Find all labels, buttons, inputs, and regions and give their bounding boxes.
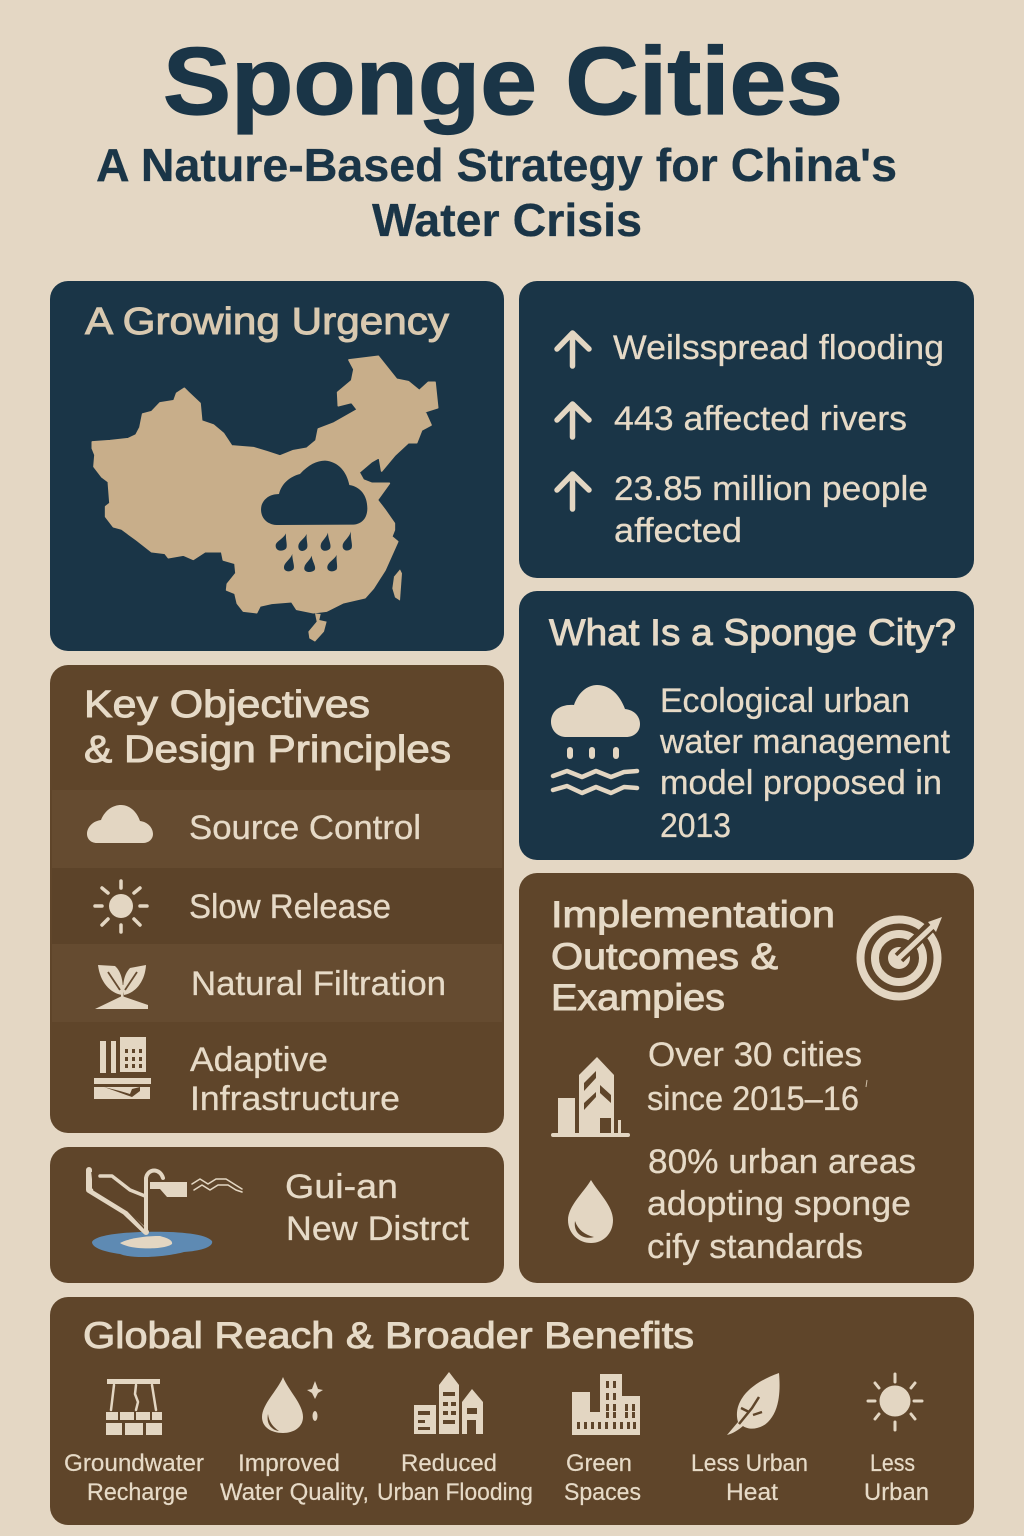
- benefit label: groundwater recharge: Recharge: [87, 1479, 188, 1506]
- benefit label: improved water quality: [220, 1450, 369, 1506]
- subtitle: Water Crisis: [372, 194, 642, 246]
- icon: reduced urban flooding: [414, 1372, 483, 1434]
- panel: global reach and broader benefits: [50, 1297, 974, 1525]
- stat: 80% urban areas: [647, 1143, 916, 1266]
- benefit label: improved water quality: Improved: [238, 1450, 340, 1477]
- stat: over 30 cities: [647, 1036, 867, 1118]
- label: gui-an new district: New Distrct: [286, 1210, 470, 1248]
- icon: sprout: [95, 965, 148, 1009]
- heading: a growing urgency: A Growing Urgency: [85, 301, 449, 343]
- label: natural filtration: Natural Filtration: [191, 965, 446, 1003]
- stat: 80% urban areas: adopting sponge: [647, 1185, 911, 1223]
- stat: rivers: 443 affected rivers: [614, 400, 907, 438]
- stat: 80% urban areas: 80% urban areas: [648, 1143, 916, 1181]
- map of China with rain cloud: [92, 356, 438, 642]
- heading: key objectives: [84, 684, 451, 771]
- label: slow release: Slow Release: [189, 888, 391, 926]
- icon: target with dart: [860, 913, 944, 996]
- stat: people affected: [614, 470, 928, 550]
- panel: gui-an new district: [50, 1147, 504, 1283]
- heading: implementation outcomes: Exampies: [551, 977, 725, 1018]
- benefit label: green spaces: [564, 1450, 641, 1506]
- icon: leaf: [727, 1373, 780, 1435]
- icon: sun: [868, 1374, 922, 1430]
- description text: Ecological urban: [660, 682, 910, 720]
- icon: sun: [95, 881, 147, 932]
- icon: cloud: [87, 805, 153, 843]
- benefit label: groundwater recharge: [64, 1450, 204, 1506]
- description text: [659, 682, 951, 845]
- stat: over 30 cities: since 2015–16: [647, 1080, 859, 1118]
- icon: groundwater recharge: [106, 1379, 162, 1435]
- panel: flood statistics: [519, 281, 974, 578]
- icon: improved water quality: [262, 1377, 323, 1433]
- benefit label: reduced urban flooding: Urban Flooding: [377, 1479, 533, 1506]
- label: gui-an new district: Gui-an: [285, 1168, 398, 1206]
- benefit label: less urban: [864, 1450, 929, 1506]
- benefit label: green spaces: Spaces: [564, 1479, 641, 1506]
- panel: a growing urgency: [50, 281, 504, 651]
- heading: implementation outcomes: Implementation: [551, 894, 835, 935]
- title: [96, 28, 897, 246]
- label: gui-an new district: [285, 1168, 470, 1248]
- stat: flooding: Weilsspread flooding: [613, 329, 944, 367]
- icon: water drop: [568, 1180, 613, 1243]
- icon: city building: [551, 1057, 630, 1137]
- icon: cloud rain and waves: [551, 685, 640, 793]
- benefit label: reduced urban flooding: [377, 1450, 533, 1506]
- title: Sponge Cities: [163, 28, 843, 135]
- description text: model proposed in: [660, 764, 942, 802]
- heading: implementation outcomes: Outcomes &: [551, 936, 778, 977]
- icon: wetland pipes: [89, 1170, 242, 1257]
- panel: implementation outcomes and examples: [519, 873, 974, 1283]
- icon: up arrow: [557, 474, 589, 509]
- stat: 80% urban areas: cify standards: [647, 1228, 863, 1266]
- label: source control: Source Control: [189, 809, 421, 847]
- heading: implementation outcomes: [551, 894, 835, 1018]
- benefit label: less urban: Less: [870, 1450, 915, 1477]
- icon: green spaces: [572, 1374, 640, 1435]
- heading: key objectives: Key Objectives: [84, 684, 370, 726]
- benefit label: reduced urban flooding: Reduced: [401, 1450, 497, 1477]
- icon: up arrow: [557, 333, 589, 366]
- subtitle: A Nature-Based Strategy for China's: [96, 139, 897, 191]
- stat: people affected: 23.85 million people: [614, 470, 928, 508]
- benefit label: improved water quality: Water Quality,: [220, 1479, 369, 1506]
- heading: what is a sponge city: What Is a Sponge City?: [549, 612, 956, 653]
- stat: over 30 cities: Over 30 cities: [648, 1036, 862, 1074]
- heading: key objectives: & Design Principles: [84, 729, 451, 771]
- subtitle: [96, 139, 897, 246]
- icon: buildings and infrastructure: [94, 1037, 151, 1099]
- description text: 2013: [660, 807, 731, 845]
- label: adaptive infrastructure: Adaptive: [190, 1041, 328, 1079]
- panel: what is a sponge city: [519, 591, 974, 860]
- benefit label: groundwater recharge: Groundwater: [64, 1450, 204, 1477]
- benefit label: less urban heat: Heat: [726, 1479, 778, 1506]
- stat: people affected: affected: [614, 512, 742, 550]
- label: adaptive infrastructure: [190, 1041, 400, 1118]
- label: adaptive infrastructure: Infrastructure: [190, 1080, 400, 1118]
- panel: key objectives and design principles: [50, 665, 504, 1133]
- icon: up arrow: [557, 404, 589, 437]
- heading: global reach: Global Reach & Broader Benefits: [83, 1315, 694, 1356]
- benefit label: less urban heat: Less Urban: [691, 1450, 808, 1477]
- description text: water management: [659, 723, 951, 761]
- benefit label: green spaces: Green: [566, 1450, 632, 1477]
- benefit label: less urban heat: [691, 1450, 808, 1506]
- benefit label: less urban: Urban: [864, 1479, 929, 1506]
